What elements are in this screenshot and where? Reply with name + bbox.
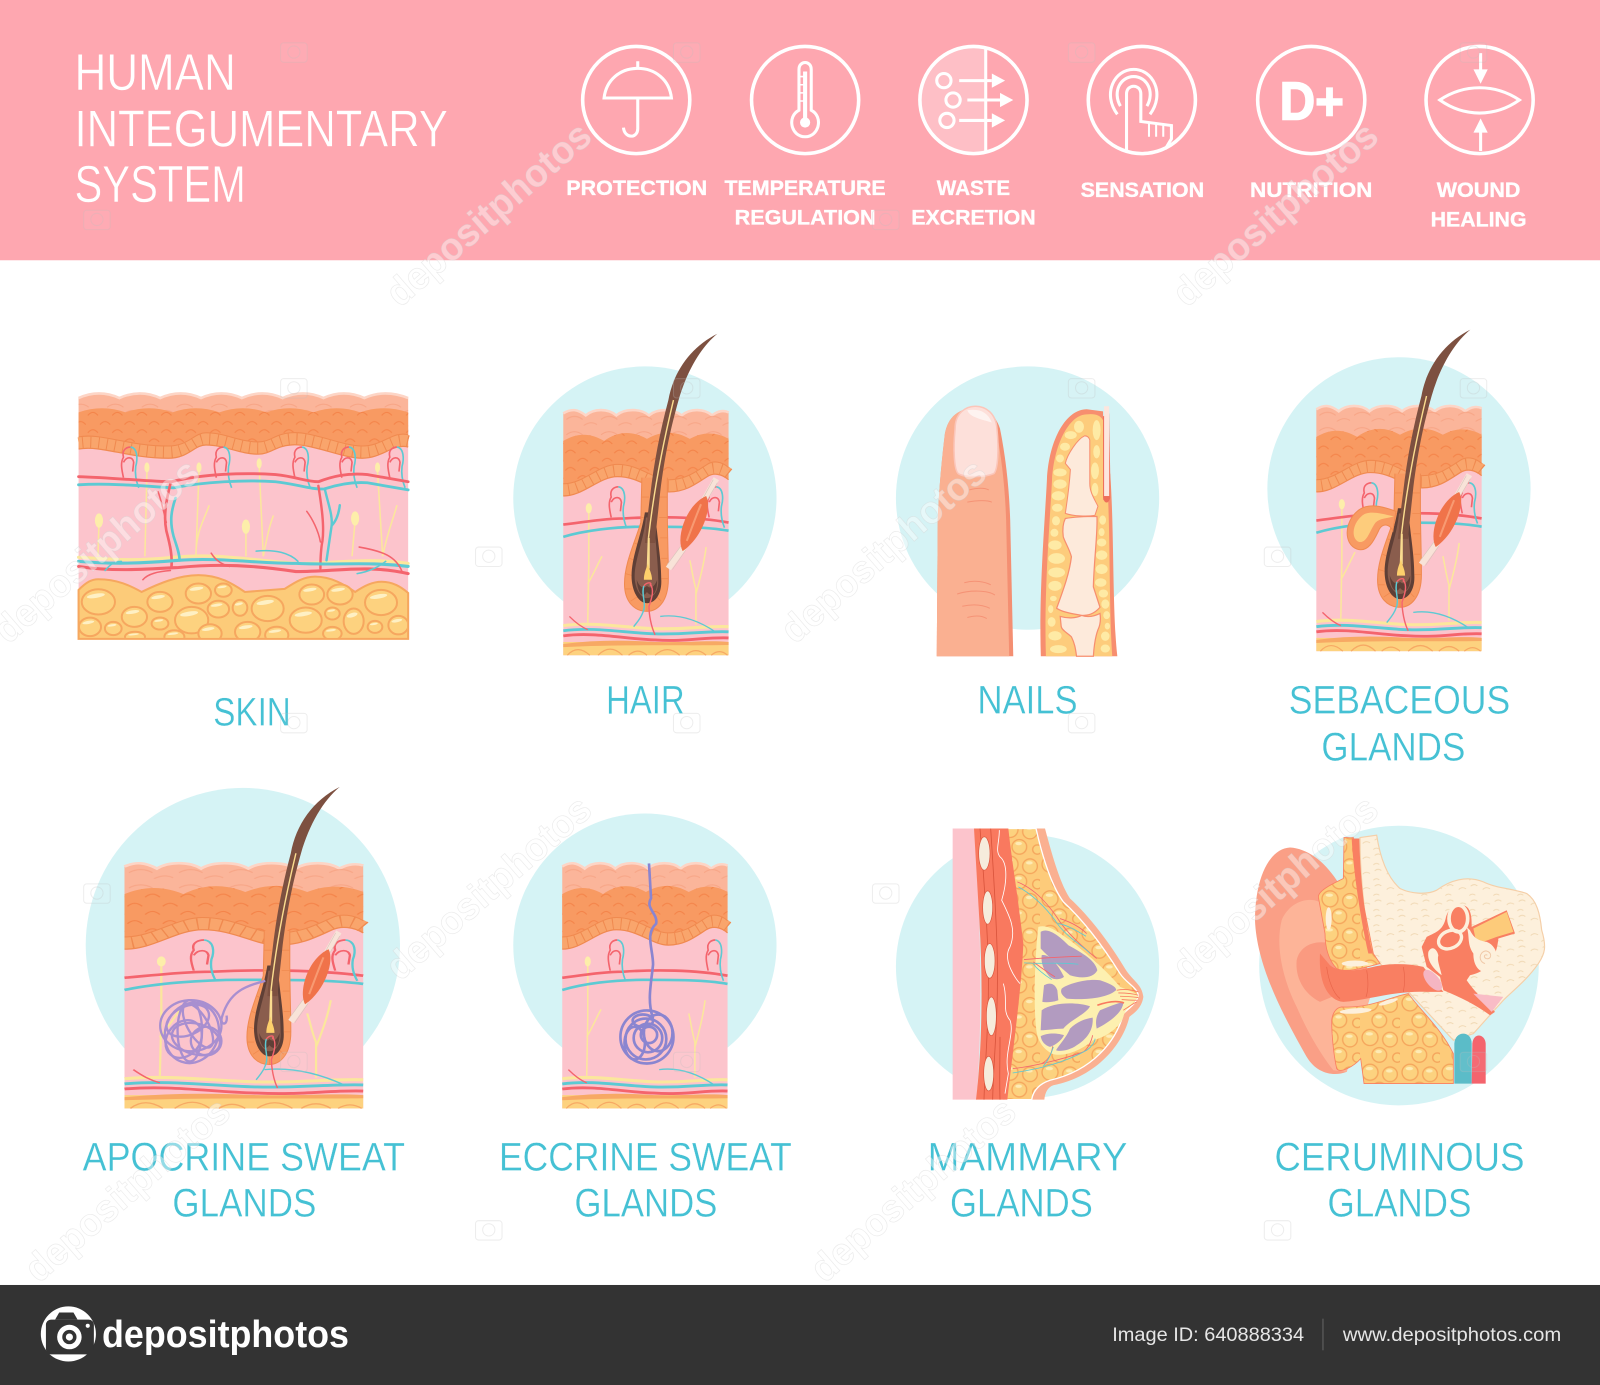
label: wound healing <box>1431 178 1527 232</box>
panel: skin <box>79 393 408 735</box>
label: mammary glands: GLANDS <box>950 1182 1093 1226</box>
blood vessels <box>79 474 408 580</box>
label: hair: HAIR <box>606 678 685 722</box>
panel: sebaceous glands <box>1267 330 1531 769</box>
backdrop circle <box>86 788 400 1102</box>
watermark text overlays: depositphotos <box>16 1090 239 1291</box>
skin cross-section illustration <box>79 393 408 644</box>
icon: vitamin D plus: D+ <box>1280 71 1344 131</box>
label: ceruminous glands: CERUMINOUS <box>1274 1136 1524 1180</box>
label: sensation: SENSATION <box>1081 178 1204 202</box>
panel: nails <box>896 366 1159 722</box>
breast cross-section <box>953 829 1143 1100</box>
footer bar <box>0 1285 1600 1385</box>
watermark text overlays: depositphotos <box>1164 114 1387 315</box>
panel: ceruminous glands <box>1255 826 1545 1226</box>
icon: thermometer <box>752 46 859 154</box>
backdrop circle <box>1259 826 1539 1105</box>
panel: apocrine sweat glands <box>83 787 405 1226</box>
label: eccrine sweat glands <box>499 1136 792 1226</box>
panel: hair <box>513 334 777 722</box>
label: waste excretion: WASTE <box>937 176 1010 200</box>
label: mammary glands <box>928 1136 1128 1226</box>
watermark text overlays: depositphotos <box>773 451 995 652</box>
icon: waste excretion <box>919 46 1027 154</box>
subcutaneous fat <box>79 575 408 639</box>
finger cross-section with bones <box>1040 406 1117 656</box>
label: sebaceous glands <box>1289 678 1510 769</box>
label: eccrine sweat glands: GLANDS <box>574 1182 717 1226</box>
header band <box>0 0 1600 260</box>
sensory nerves <box>98 465 397 556</box>
label: mammary glands: MAMMARY <box>928 1136 1128 1180</box>
fat cells <box>79 583 408 644</box>
panel: mammary glands <box>896 829 1159 1226</box>
title: SYSTEM <box>74 156 246 214</box>
skin section with eccrine gland <box>562 863 728 1108</box>
label: nutrition: NUTRITION <box>1250 178 1372 202</box>
title <box>74 44 448 214</box>
skin section with apocrine gland <box>124 787 363 1108</box>
label: temperature regulation: REGULATION <box>735 206 876 230</box>
watermark text overlays: depositphotos <box>378 787 600 989</box>
label: protection: PROTECTION <box>566 176 707 200</box>
label: temperature regulation: TEMPERATURE <box>724 176 886 200</box>
label: waste excretion <box>911 176 1036 230</box>
icon: sensation finger <box>1088 46 1195 154</box>
backdrop circle <box>513 813 777 1077</box>
ear cross-section <box>1255 835 1545 1084</box>
label: sebaceous glands: SEBACEOUS <box>1289 678 1510 722</box>
label: waste excretion: EXCRETION <box>911 206 1036 230</box>
skin section with hair follicle <box>563 334 729 655</box>
website: www.depositphotos.com <box>1342 1324 1561 1346</box>
label: sebaceous glands: GLANDS <box>1321 725 1465 769</box>
watermark text overlays: depositphotos <box>378 114 600 315</box>
watermark text overlays: depositphotos <box>802 1090 1024 1291</box>
title: HUMAN <box>74 44 236 102</box>
logo wordmark: depositphotos <box>102 1313 349 1355</box>
label: ceruminous glands <box>1274 1136 1524 1226</box>
label: eccrine sweat glands: ECCRINE SWEAT <box>499 1136 792 1180</box>
label: wound healing: HEALING <box>1431 208 1527 232</box>
backdrop circle <box>513 366 777 630</box>
label: temperature regulation <box>724 176 886 230</box>
watermark camera marks <box>84 43 1487 1240</box>
capillary loops <box>122 447 405 488</box>
watermark text overlays: depositphotos <box>1164 787 1387 989</box>
finger exterior with nail <box>937 406 1013 656</box>
icon: wound healing <box>1426 46 1533 154</box>
label: apocrine sweat glands: APOCRINE SWEAT <box>83 1136 405 1180</box>
skin section with sebaceous gland <box>1316 330 1482 651</box>
label: nails: NAILS <box>978 678 1078 722</box>
backdrop circle <box>1267 357 1531 621</box>
image id: Image ID: 640888334 <box>1112 1324 1304 1346</box>
label: skin: SKIN <box>213 691 291 735</box>
label: apocrine sweat glands: GLANDS <box>172 1182 316 1226</box>
backdrop circle <box>896 835 1159 1098</box>
icon: vitamin D plus <box>1258 46 1365 154</box>
backdrop circle <box>896 366 1159 630</box>
title: INTEGUMENTARY <box>74 100 448 158</box>
panel: eccrine sweat glands <box>499 813 792 1226</box>
label: apocrine sweat glands <box>83 1136 405 1226</box>
icon: depositphotos camera logo <box>41 1306 96 1362</box>
icon: protection umbrella <box>583 46 690 154</box>
label: wound healing: WOUND <box>1437 178 1520 202</box>
watermark text overlays <box>0 114 1387 1291</box>
label: ceruminous glands: GLANDS <box>1328 1182 1471 1226</box>
